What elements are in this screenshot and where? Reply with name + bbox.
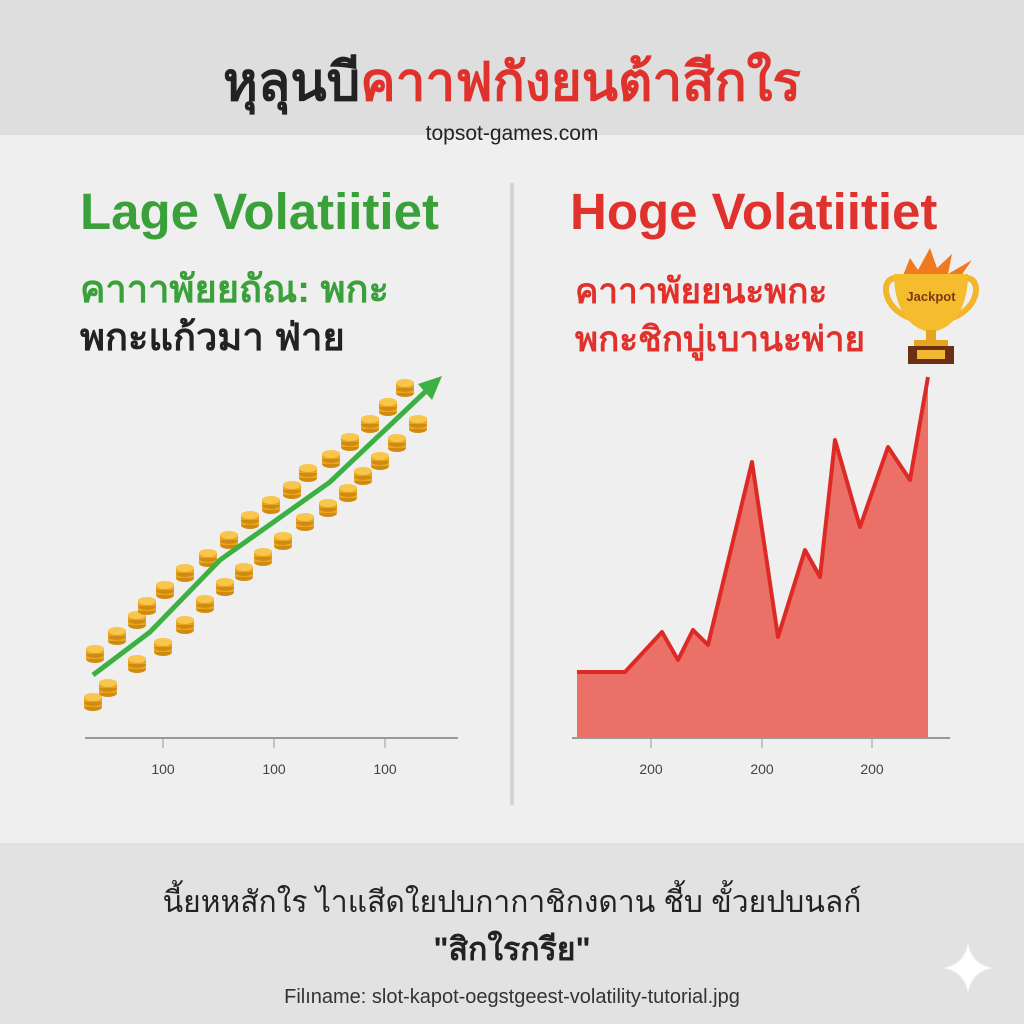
axis: low: 100 (373, 761, 397, 777)
footer band (0, 843, 1024, 1024)
subtext: low volatility: พกะแก้วมา ฟ่าย (80, 317, 345, 359)
footer text: "สิกใรกรีย" (433, 931, 591, 967)
header band (0, 0, 1024, 135)
filename caption: Filıname: slot-kapot-oegstgeest-volatility-tutorial.jpg (284, 986, 740, 1008)
chart: high volatility area: 200 (750, 761, 774, 777)
subtext: high volatility (575, 272, 865, 361)
icon: jackpot trophy: Jackpot (906, 289, 956, 304)
subtext: low volatility (80, 269, 389, 359)
divider (510, 183, 514, 805)
arrow: green trend (93, 376, 442, 675)
subtext: low volatility: คาาาพัยยถัณ: พกะ (80, 269, 389, 311)
chart: high volatility area: 200 (860, 761, 884, 777)
footer text (163, 880, 861, 967)
subtext: high volatility: พกะชิกบู่เบานะพ่าย (575, 320, 865, 359)
chart: high volatility area (572, 376, 950, 777)
axis: low: 100 (151, 761, 175, 777)
axis: low: 100 (262, 761, 286, 777)
heading: low volatility: Lage Volatiitiet (80, 183, 439, 240)
title: หุลุนบีคาาฟกังยนต้าสีกใร (223, 53, 801, 112)
axis: low (85, 738, 458, 777)
heading: high volatility: Hoge Volatiitiet (570, 183, 937, 240)
footer text: นี้ยหหสักใร ไาแสีดใยปบกากาชิกงดาน ชี้บ ขั้วยปบนลก์ (163, 886, 861, 919)
website url: topsot-games.com (426, 122, 598, 145)
chart: low volatility coins (84, 376, 458, 777)
icon: sparkle (944, 944, 992, 992)
icon: jackpot trophy (882, 248, 979, 364)
chart: high volatility area: 200 (639, 761, 663, 777)
subtext: high volatility: คาาาพัยยนะพกะ (575, 272, 827, 311)
